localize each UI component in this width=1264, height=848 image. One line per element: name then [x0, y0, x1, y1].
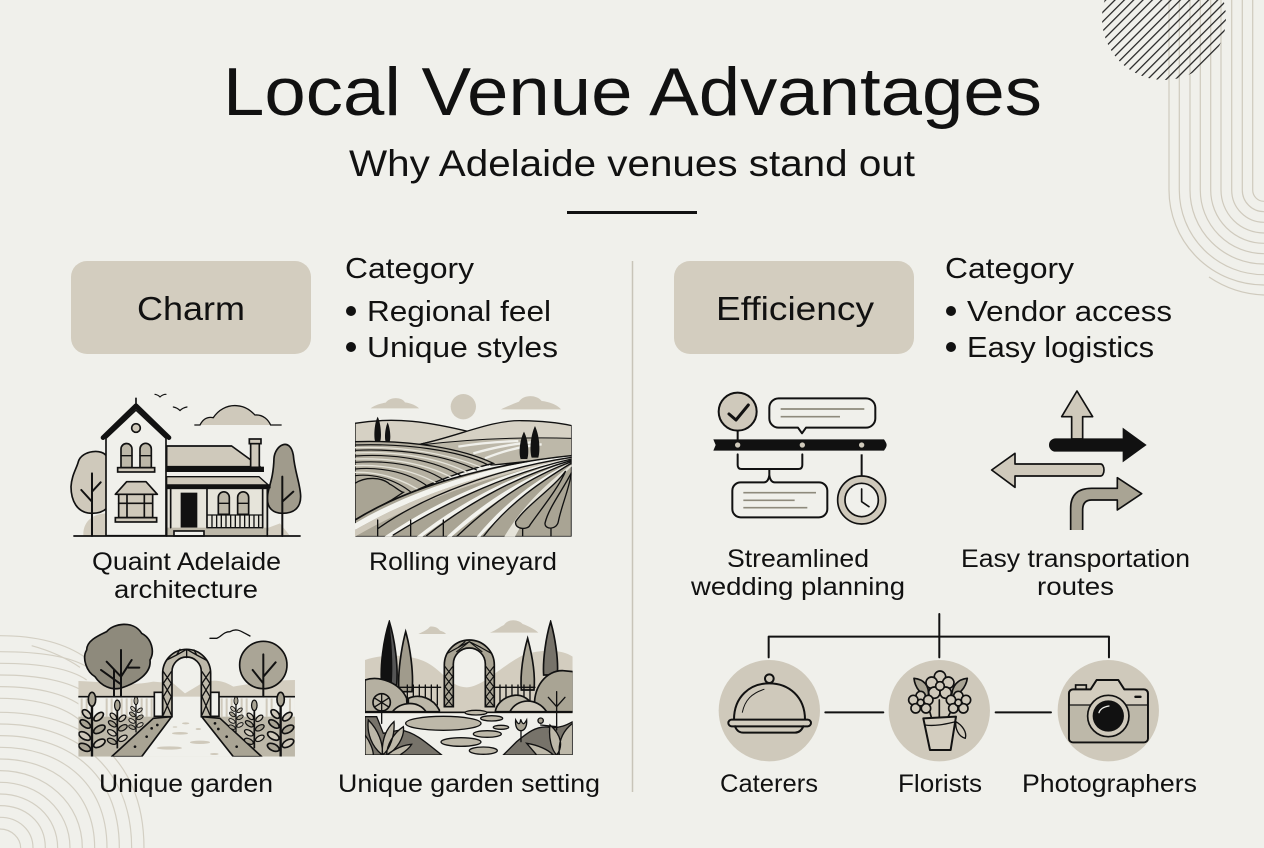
- icon: transportation arrows: [992, 391, 1147, 530]
- icon: wedding planning timeline: [713, 393, 887, 524]
- icon: garden with arch: [78, 624, 295, 757]
- panel: efficiency: [674, 253, 1197, 798]
- charm heading badge: Charm: [137, 290, 245, 327]
- icon: photographers camera: [1058, 660, 1159, 761]
- decoration: hatched circle: [1102, 0, 1226, 80]
- title rule: [567, 211, 697, 214]
- center divider: [632, 261, 634, 792]
- label: Streamlined wedding planning: [690, 545, 905, 601]
- label: Quaint Adelaide architecture: Quaint Adelaide: [92, 548, 281, 576]
- icon: florists bouquet: [889, 660, 990, 761]
- vendor connector lines: [769, 614, 1109, 712]
- efficiency heading badge: Efficiency: [716, 290, 875, 327]
- icon: garden setting with pond: [365, 620, 573, 755]
- label: Photographers: Photographers: [1022, 770, 1197, 798]
- charm category list: Unique styles: [367, 332, 558, 364]
- label: Unique garden: Unique garden: [99, 770, 273, 798]
- icon: caterers cloche: [719, 660, 820, 761]
- label: Streamlined wedding planning: wedding planning: [690, 573, 905, 601]
- efficiency category list: Category: [945, 253, 1075, 285]
- label: Easy transportation routes: Easy transportation: [961, 545, 1190, 573]
- label: Streamlined wedding planning: Streamlined: [727, 545, 869, 573]
- label: Easy transportation routes: [961, 545, 1190, 601]
- label: Unique garden setting: Unique garden setting: [338, 770, 600, 798]
- label: Quaint Adelaide architecture: architecture: [114, 576, 258, 604]
- panel: charm: [71, 253, 600, 798]
- decoration: bottom-left arcs: [0, 636, 144, 848]
- charm category list: Category: [345, 253, 475, 285]
- efficiency category list: Easy logistics: [967, 332, 1154, 364]
- efficiency category list: Vendor access: [967, 296, 1172, 328]
- label: Caterers: Caterers: [720, 770, 818, 798]
- decoration: top-right arcs: [1169, 0, 1264, 295]
- efficiency heading badge: [674, 261, 914, 354]
- charm category list: [345, 253, 558, 364]
- label: Florists: Florists: [898, 770, 982, 798]
- label: Easy transportation routes: routes: [1037, 573, 1114, 601]
- charm category list: Regional feel: [367, 296, 551, 328]
- label: Rolling vineyard: Rolling vineyard: [369, 548, 557, 576]
- subtitle: Why Adelaide venues stand out: [349, 143, 916, 184]
- icon: house: [71, 394, 301, 536]
- icon: vineyard: [355, 394, 572, 537]
- label: Quaint Adelaide architecture: [92, 548, 281, 604]
- title: Local Venue Advantages: [223, 54, 1042, 130]
- efficiency category list: [945, 253, 1172, 364]
- charm heading badge: [71, 261, 311, 354]
